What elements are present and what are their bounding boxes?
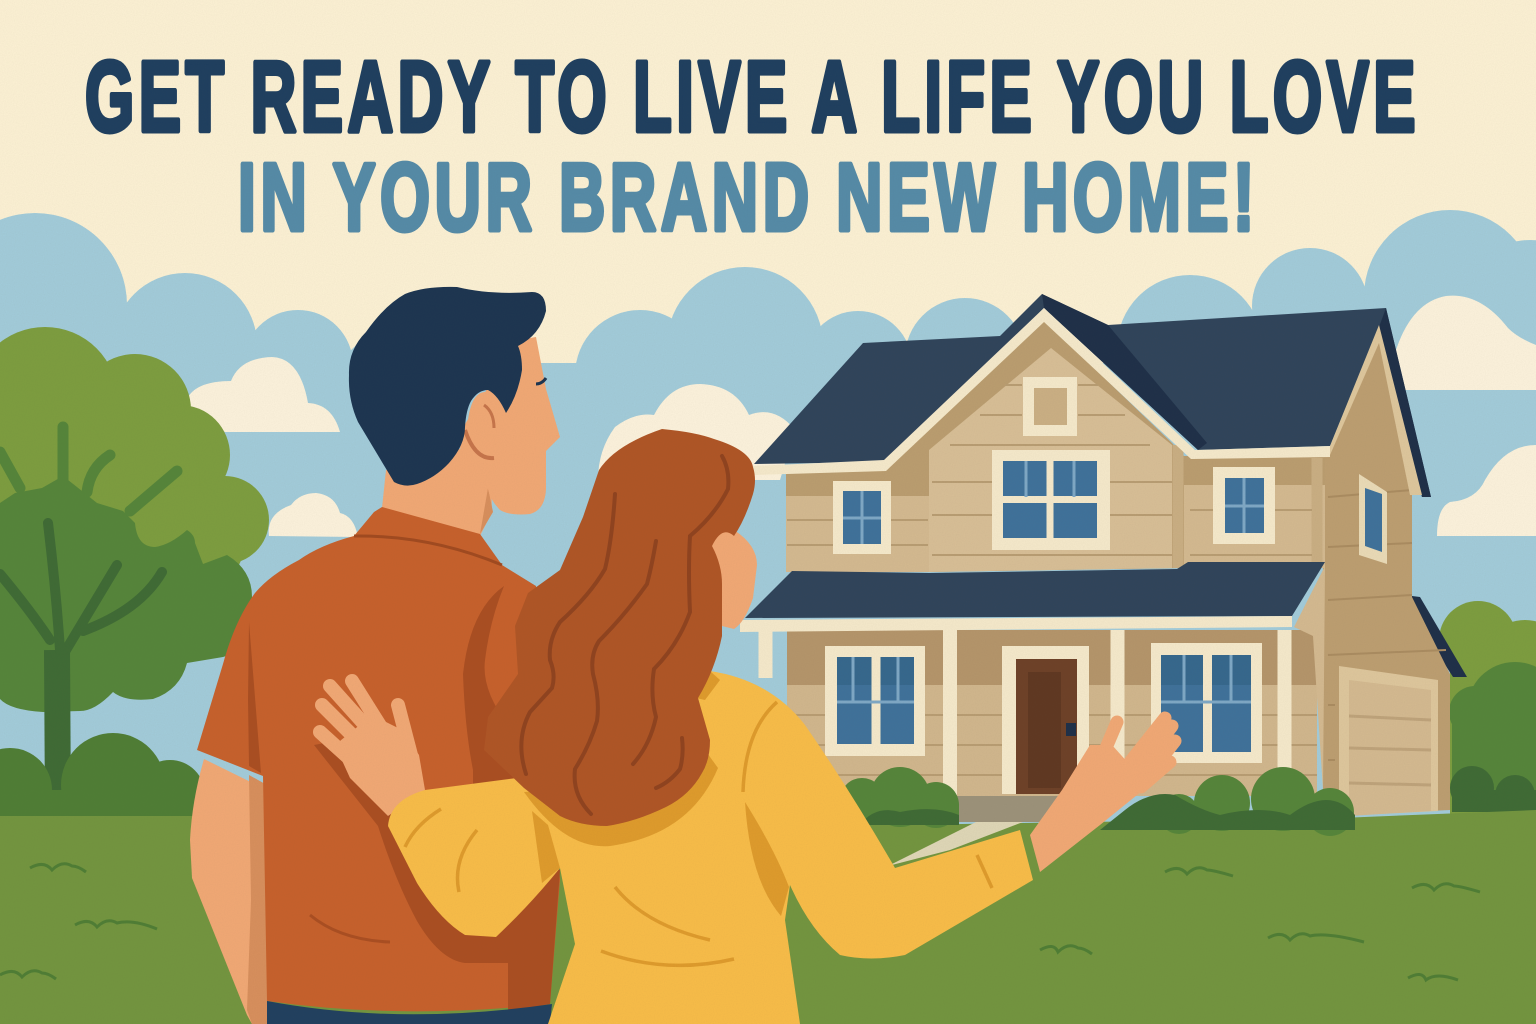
man hair (349, 287, 546, 486)
man left arm (190, 759, 267, 1024)
porch beam (740, 616, 1292, 632)
sweater folds (405, 702, 992, 965)
porch steps (957, 796, 1067, 822)
ground (0, 810, 1536, 1024)
forearm and palm (1030, 745, 1168, 872)
woman sweater body (540, 671, 1033, 1024)
sleeve fold (248, 622, 261, 773)
tree dark foliage (0, 476, 252, 712)
man eye (536, 378, 546, 384)
right shrub dark (1450, 766, 1536, 815)
neck shadow (480, 488, 493, 534)
lower right window (1151, 643, 1262, 763)
cloud right upper (1396, 296, 1536, 390)
shirt collar line (354, 536, 502, 565)
man hand on woman arm (320, 681, 425, 816)
tree trunk and branches (0, 523, 162, 815)
tree light branches (0, 427, 177, 511)
side gable trim (1330, 325, 1422, 495)
side window (1359, 474, 1387, 564)
arm shadow on shirt (314, 740, 560, 1012)
gable inner wall (929, 348, 1172, 572)
shrubs left of door (840, 767, 959, 828)
woman arm around man (388, 775, 575, 937)
right hedge (1449, 662, 1536, 812)
centre upper window (992, 450, 1110, 550)
left shrub shade (860, 809, 959, 825)
attic window (1023, 377, 1077, 436)
siding lines (787, 385, 1312, 555)
roof ridge shade (1042, 294, 1207, 450)
sweater dark fold (745, 802, 789, 916)
front gable and eave trim (753, 308, 1330, 475)
right tree foliage (1439, 601, 1536, 820)
house (740, 294, 1467, 822)
roof right edge shade (1379, 308, 1431, 497)
shrubs right of door (1100, 767, 1355, 836)
gable outer shade (886, 320, 1184, 572)
cloud left (186, 357, 340, 432)
background tree (0, 327, 269, 815)
tree light foliage (0, 327, 269, 595)
hedges left (0, 733, 205, 837)
sky and blue clouds (0, 210, 1536, 833)
sweater shoulder shade (696, 671, 720, 700)
garage roof (1412, 596, 1467, 677)
post trim (1178, 445, 1317, 568)
left upper window (833, 481, 891, 554)
hair strands (521, 456, 728, 814)
back fold (463, 586, 530, 830)
porch roof (745, 562, 1325, 618)
left wing wall (786, 470, 931, 572)
front door (1002, 646, 1089, 794)
hand palm (335, 715, 425, 816)
cloud small (269, 493, 358, 537)
cloud right lower (1437, 445, 1536, 536)
jaw shadow (465, 430, 494, 458)
porch siding (787, 715, 1317, 775)
woman hair (484, 429, 755, 826)
man face (455, 337, 560, 514)
arm shade wedge (532, 811, 560, 883)
path to house (888, 822, 1023, 866)
woman (320, 429, 1175, 1024)
shirt crease (310, 915, 390, 942)
shadow under hair (524, 750, 718, 846)
garage door (1339, 666, 1438, 816)
upper roof (754, 294, 1431, 497)
porch gable side (1294, 566, 1325, 790)
woman face (712, 530, 757, 629)
grass tufts (0, 864, 1480, 980)
lower left window (825, 646, 925, 756)
man (190, 287, 560, 1024)
raised fingers (1103, 718, 1175, 787)
side wall siding (1328, 490, 1446, 760)
right wing wall (1180, 456, 1325, 568)
man neck (382, 440, 492, 536)
title (85, 41, 1420, 251)
trees right (1439, 601, 1536, 820)
hand fingers (320, 681, 411, 770)
lower wall (787, 630, 1317, 796)
man arm shade (247, 775, 267, 1024)
cloud centre (598, 384, 795, 480)
side wall (1323, 340, 1450, 816)
woman raised forearm and hand (1030, 718, 1175, 872)
cream clouds (186, 296, 1536, 537)
right shrub shade (1100, 794, 1355, 830)
right upper window (1213, 467, 1275, 544)
man shirt (197, 507, 560, 1011)
woman ear (711, 535, 729, 571)
jeans (267, 1001, 552, 1024)
porch columns (766, 630, 1284, 795)
man ear (468, 392, 498, 451)
